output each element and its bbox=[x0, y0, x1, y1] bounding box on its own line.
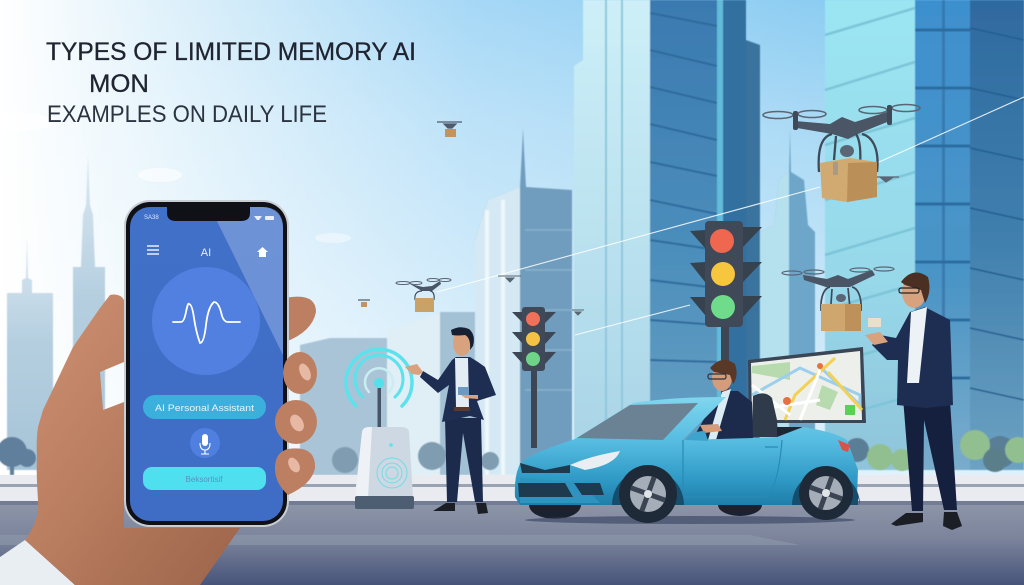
head bbox=[453, 330, 471, 356]
driver bbox=[692, 360, 753, 440]
sleeve bbox=[0, 540, 75, 585]
screen label: AI bbox=[201, 247, 211, 259]
far left towers bbox=[7, 155, 105, 470]
action pill bbox=[143, 467, 266, 490]
spire tower bbox=[760, 130, 815, 470]
title: EXAMPLES ON DAILY LIFE bbox=[47, 101, 327, 128]
small distant drones bbox=[358, 122, 899, 315]
traffic light: small bbox=[512, 307, 556, 448]
notch bbox=[167, 205, 250, 221]
smart speaker with signal bbox=[346, 349, 414, 509]
jacket bbox=[420, 357, 496, 422]
man with package bbox=[865, 273, 962, 530]
assistant pill bbox=[143, 395, 266, 419]
front wheel bbox=[619, 465, 677, 523]
wing mirror bbox=[686, 431, 708, 441]
trees bbox=[0, 430, 1024, 475]
rear wheel bbox=[799, 466, 853, 520]
drone with box: large bbox=[763, 104, 920, 202]
drone with box: far bbox=[396, 278, 451, 312]
legs bbox=[902, 385, 957, 511]
palm and thumb bbox=[25, 295, 240, 585]
phone bbox=[124, 200, 289, 527]
wheel arches bbox=[612, 469, 860, 505]
action pill: Beksortisif bbox=[186, 475, 223, 484]
hands and parcel bbox=[865, 332, 888, 345]
rear interior bbox=[777, 427, 802, 437]
map display bbox=[748, 347, 866, 423]
title bbox=[46, 38, 416, 128]
shoes bbox=[433, 503, 488, 514]
sidewalk bbox=[0, 475, 1024, 502]
jacket bbox=[872, 307, 953, 408]
hand holding phone bbox=[0, 200, 317, 585]
grille bbox=[518, 463, 604, 497]
mid buildings bbox=[300, 312, 475, 475]
car body bbox=[515, 397, 858, 505]
assistant pill: AI Personal Assistant bbox=[155, 403, 254, 414]
traffic light: large bbox=[690, 221, 762, 407]
door details bbox=[683, 440, 782, 497]
wires bbox=[437, 97, 1024, 335]
shadow bbox=[525, 516, 855, 524]
car and driver bbox=[515, 347, 866, 524]
far wheels bbox=[529, 491, 581, 519]
title: MON bbox=[89, 70, 149, 98]
windshield bbox=[577, 403, 698, 440]
tall central tower bbox=[475, 128, 572, 475]
status bar: SA38 bbox=[144, 215, 159, 221]
finger behind phone bbox=[285, 297, 316, 342]
road bbox=[0, 501, 1024, 585]
legs bbox=[445, 418, 483, 502]
signal arcs bbox=[346, 349, 412, 406]
home icon bbox=[257, 247, 268, 257]
waveform bbox=[173, 302, 240, 343]
hand and device bbox=[405, 364, 423, 375]
status bar bbox=[144, 215, 274, 221]
seat bbox=[752, 393, 778, 437]
menu icon bbox=[147, 246, 159, 254]
head bbox=[902, 276, 926, 308]
title: TYPES OF LIMITED MEMORY AI bbox=[46, 38, 416, 66]
tail light bbox=[838, 440, 850, 452]
voice circle bbox=[152, 267, 260, 375]
headlight bbox=[570, 451, 620, 470]
right glass tower bbox=[825, 0, 1024, 470]
man with speaker bbox=[405, 327, 496, 514]
fingertips over phone bbox=[275, 352, 317, 495]
drone with box: medium bbox=[782, 267, 894, 331]
mic icon bbox=[190, 428, 220, 458]
large blue tower bbox=[574, 0, 760, 470]
shoes bbox=[891, 512, 962, 530]
